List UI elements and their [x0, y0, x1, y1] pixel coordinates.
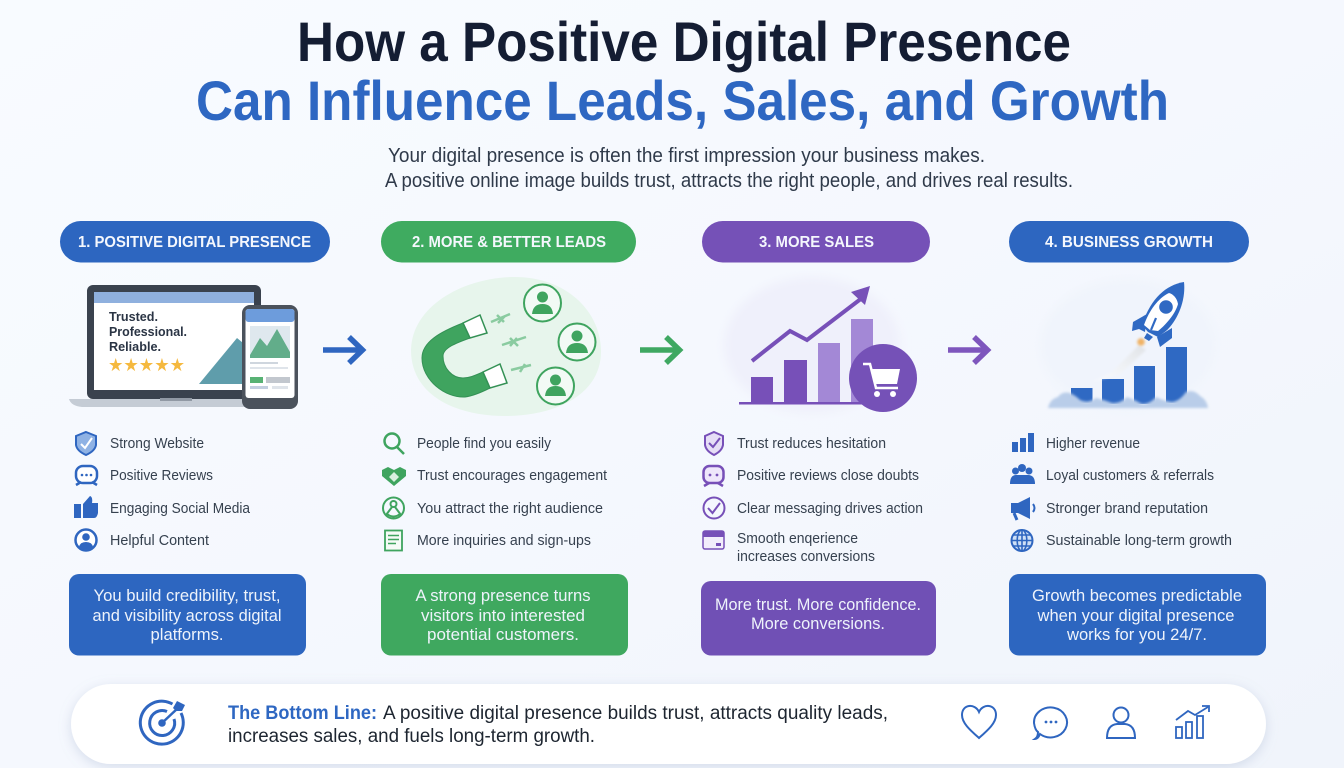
icon: person outline [1107, 708, 1135, 738]
subtitle: Your digital presence is often the first impression your business makes. [388, 145, 985, 167]
icon: heart [962, 706, 996, 738]
subtitle [385, 145, 1073, 192]
callout 4: when your digital presence [1036, 607, 1234, 625]
icon: shield [76, 432, 96, 455]
bullet list 4 [1010, 433, 1232, 551]
callout 2: potential customers. [427, 626, 579, 644]
icon: handshake [382, 467, 406, 486]
illustration: laptop and phone: Trusted. [109, 309, 158, 324]
callout 1: and visibility across digital [92, 607, 282, 625]
arrow: purple [948, 337, 988, 363]
heading pill 3 [702, 221, 930, 262]
bullet list 4: Loyal customers & referrals [1046, 468, 1214, 484]
bullet list 4: Sustainable long-term growth [1046, 533, 1232, 549]
bullet list 3: Trust reduces hesitation [737, 436, 886, 452]
panel: the bottom line [71, 684, 1266, 764]
callout 3: More conversions. [751, 615, 885, 633]
bullet list 3: Clear messaging drives action [737, 501, 923, 517]
bullet list 2: More inquiries and sign-ups [417, 533, 591, 549]
bullet list 1: Strong Website [110, 436, 204, 452]
icon: megaphone [1011, 497, 1034, 520]
icon: shield check [705, 432, 723, 455]
bullet list 1 [74, 432, 251, 550]
panel: positive digital presence [60, 221, 330, 656]
icon: magnifier [384, 434, 404, 454]
bullet list 3 [703, 432, 923, 565]
illustration: laptop and phone: Professional. [109, 324, 187, 339]
arrow: green [640, 337, 680, 363]
bullet list 3: Smooth enqerience [737, 531, 858, 547]
heading pill 1: 1. POSITIVE DIGITAL PRESENCE [78, 234, 311, 251]
bottom line text: The Bottom Line: [228, 703, 377, 724]
icon: user circle [76, 530, 96, 550]
title: How a Positive Digital Presence [297, 10, 1071, 73]
icon: people [1010, 464, 1035, 484]
bullet list 2: You attract the right audience [417, 501, 603, 517]
icon: person 1 [524, 284, 561, 322]
illustration: sales chart and cart [724, 277, 917, 413]
icon: target [140, 701, 185, 744]
bullet list 1: Positive Reviews [110, 468, 213, 484]
callout 4: Growth becomes predictable [1032, 587, 1242, 605]
icon: person 2 [558, 324, 596, 360]
bullet list 3: increases conversions [737, 549, 875, 565]
bullet list 1: Helpful Content [110, 533, 209, 549]
icon: person 3 [537, 368, 574, 404]
icon: globe [1012, 530, 1032, 551]
icon: credit card [703, 531, 724, 549]
bottom line text: increases sales, and fuels long-term growth. [228, 726, 595, 747]
heading pill 2: 2. MORE & BETTER LEADS [412, 234, 606, 251]
illustration: laptop and phone: ★★★★★ [108, 355, 185, 375]
panel: business growth [1009, 221, 1266, 656]
bullet list 4: Higher revenue [1046, 436, 1140, 452]
illustration: laptop and phone [69, 285, 298, 409]
heading pill 3: 3. MORE SALES [759, 234, 874, 251]
heading pill 2 [381, 221, 636, 262]
callout 1: platforms. [150, 626, 224, 644]
icon: growth chart [1176, 706, 1209, 738]
illustration: magnet attracting people [411, 277, 601, 416]
panel: more sales [701, 221, 936, 656]
bottom line text [228, 703, 888, 747]
callout 1: You build credibility, trust, [94, 587, 280, 605]
icon: bar chart [1012, 433, 1034, 452]
title: Can Influence Leads, Sales, and Growth [196, 69, 1169, 132]
bullet list 4: Stronger brand reputation [1046, 501, 1208, 517]
callout 4: works for you 24/7. [1066, 626, 1207, 644]
illustration: laptop and phone: Reliable. [109, 339, 161, 354]
icon: speech bubble [1034, 707, 1067, 739]
callout 3: More trust. More confidence. [715, 596, 921, 614]
icon: chat [76, 466, 97, 485]
bullet list 2: Trust encourages engagement [417, 468, 607, 484]
icon: chat bubble [704, 466, 724, 486]
bullet list 1: Engaging Social Media [110, 501, 251, 517]
title [196, 10, 1169, 132]
icon: audience target [383, 498, 404, 518]
callout 2: visitors into interested [421, 607, 585, 625]
callout 2: A strong presence turns [416, 587, 590, 605]
callout 3 [701, 581, 936, 656]
heading pill 1 [60, 221, 330, 262]
subtitle: A positive online image builds trust, attracts the right people, and drives real results. [385, 170, 1073, 192]
icon: thumbs up [74, 496, 98, 518]
heading pill 4: 4. BUSINESS GROWTH [1045, 234, 1213, 251]
callout 4 [1009, 574, 1266, 656]
callout 1 [69, 574, 306, 656]
panel: more and better leads [381, 221, 636, 656]
icon: shopping cart [863, 364, 900, 397]
bullet list 3: Positive reviews close doubts [737, 468, 919, 484]
icon: check circle [704, 498, 724, 518]
arrow: blue [323, 337, 362, 363]
heading pill 4 [1009, 221, 1249, 262]
icon: document [385, 530, 402, 550]
bullet list 2: People find you easily [417, 436, 552, 452]
bottom line text: A positive digital presence builds trust, attracts quality leads, [383, 703, 888, 724]
bullet list 2 [382, 434, 607, 550]
callout 2 [381, 574, 628, 656]
illustration: rocket and bars [1040, 279, 1216, 411]
